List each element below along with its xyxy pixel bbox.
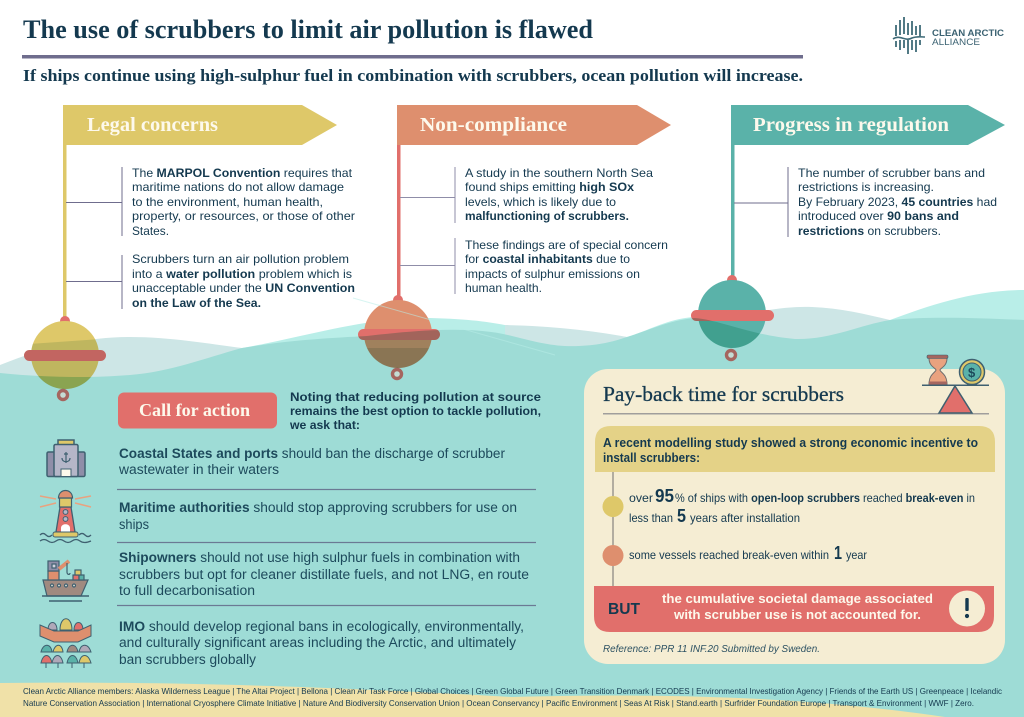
timeline dot: orange bbox=[602, 545, 624, 566]
icon: scale with hourglass and coin: $ bbox=[968, 365, 976, 380]
footer members: Nature Conservation Association | International Cryosphere Climate Initiative | Nature And Biodiversity Conservation Union | Ocean Conservancy | Pacific Environment | Seas At Risk | Stand.earth | Surfrider Foundation Europe | Transport & Environment | WWF | Zero. bbox=[23, 698, 974, 708]
call for action intro: remains the best option to tackle pollution, bbox=[290, 404, 541, 418]
text: MARPOL: maritime nations do not allow damage bbox=[132, 180, 344, 194]
connector brackets bbox=[400, 167, 455, 294]
banner: non-compliance: Non-compliance bbox=[420, 114, 567, 136]
text: 95 percent: 95 bbox=[655, 486, 674, 506]
text: coastal inhabitants: human health. bbox=[465, 281, 542, 295]
text: maritime authorities: Maritime authorities should stop approving scrubbers for use on bbox=[119, 500, 517, 515]
call for action intro: Noting that reducing pollution at source bbox=[290, 390, 541, 404]
text: coastal states: wastewater in their waters bbox=[118, 462, 279, 477]
text: water pollution: on the Law of the Sea. bbox=[132, 296, 261, 310]
text: 95 percent: less than bbox=[629, 511, 673, 525]
text: water pollution: into a water pollution problem which is bbox=[132, 267, 352, 281]
study intro box: A recent modelling study showed a strong economic incentive to bbox=[603, 436, 978, 450]
text: coastal inhabitants bbox=[465, 238, 668, 295]
text: bans: By February 2023, 45 countries had bbox=[798, 195, 997, 209]
text: water pollution: unacceptable under the UN Convention bbox=[132, 281, 355, 295]
text: 95 percent: 5 bbox=[677, 506, 686, 526]
call for action intro: we ask that: bbox=[289, 418, 360, 432]
text: bans: restrictions is increasing. bbox=[798, 180, 934, 194]
title rule bbox=[22, 55, 803, 58]
text: 95 percent bbox=[629, 486, 975, 526]
logo: Clean Arctic Alliance: ALLIANCE bbox=[932, 37, 980, 48]
logo: Clean Arctic Alliance bbox=[893, 17, 1004, 54]
text: bans: restrictions on scrubbers. bbox=[798, 224, 941, 238]
text: MARPOL bbox=[132, 166, 355, 238]
banner: progress in regulation bbox=[731, 105, 1005, 145]
text: IMO bbox=[119, 619, 524, 667]
panel: non-compliance bbox=[397, 105, 671, 300]
banner: progress in regulation: Progress in regulation bbox=[753, 114, 949, 136]
BUT box: BUT bbox=[608, 601, 640, 618]
text: 1 year: 1 bbox=[834, 543, 842, 563]
footer members bbox=[23, 686, 1003, 708]
icon: scale with hourglass and coin bbox=[922, 355, 989, 413]
timeline dot: yellow bbox=[602, 496, 624, 517]
text: high SOx: found ships emitting high SOx bbox=[465, 180, 634, 194]
buoy: teal bbox=[691, 275, 774, 360]
footer band background bbox=[0, 683, 945, 717]
icon: exclamation bbox=[949, 590, 985, 626]
text: water pollution: Scrubbers turn an air pollution problem bbox=[132, 252, 349, 266]
buoy line bbox=[731, 145, 734, 282]
icon: lighthouse bbox=[40, 490, 91, 542]
icon: ship bbox=[42, 561, 89, 601]
panel: progress in regulation bbox=[731, 105, 1005, 282]
call for action button bbox=[118, 392, 277, 428]
text: coastal inhabitants: for coastal inhabitants due to bbox=[465, 252, 630, 266]
text: MARPOL: States. bbox=[132, 224, 169, 238]
buoy line bbox=[397, 145, 400, 300]
subtitle: If ships continue using high-sulphur fuel in combination with scrubbers, ocean pollution will increase. bbox=[23, 66, 803, 85]
text: MARPOL: The MARPOL Convention requires that bbox=[132, 166, 353, 180]
title: The use of scrubbers to limit air pollution is flawed bbox=[23, 14, 593, 44]
text: shipowners: to full decarbonisation bbox=[119, 583, 255, 598]
heading rule bbox=[603, 413, 989, 414]
text: high SOx: malfunctioning of scrubbers. bbox=[465, 209, 629, 223]
text: 95 percent: over bbox=[629, 491, 653, 505]
buoy: orange bbox=[358, 295, 440, 378]
text: maritime authorities: ships bbox=[119, 517, 149, 532]
text: shipowners: Shipowners should not use high sulphur fuels in combination with bbox=[119, 550, 520, 565]
text: 95 percent: % of ships with open-loop scrubbers reached break-even in bbox=[675, 491, 975, 505]
BUT box bbox=[594, 586, 994, 632]
text: 1 year: some vessels reached break-even within bbox=[629, 548, 829, 562]
timeline line bbox=[612, 472, 614, 586]
text: high SOx: levels, which is likely due to bbox=[465, 195, 616, 209]
banner: legal concerns: Legal concerns bbox=[87, 114, 218, 136]
panel: legal concerns bbox=[63, 105, 355, 320]
text: coastal states: Coastal States and ports should ban the discharge of scrubber bbox=[119, 446, 505, 461]
text: coastal inhabitants: These findings are of special concern bbox=[465, 238, 668, 252]
icon: IMO assembly bbox=[40, 619, 91, 668]
heading: pay-back time: Pay-back time for scrubbers bbox=[603, 382, 844, 406]
text: coastal inhabitants: impacts of sulphur emissions on bbox=[465, 267, 640, 281]
call for action intro bbox=[289, 390, 541, 432]
text: bans bbox=[798, 166, 997, 238]
study intro box bbox=[595, 426, 995, 472]
banner: non-compliance bbox=[397, 105, 671, 145]
buoy line bbox=[63, 145, 66, 320]
text: 95 percent: years after installation bbox=[690, 511, 800, 525]
text: high SOx bbox=[465, 166, 653, 223]
text: MARPOL: to the environment, human health, bbox=[132, 195, 323, 209]
text: 1 year bbox=[629, 543, 867, 563]
text: high SOx: A study in the southern North Sea bbox=[465, 166, 653, 180]
panel: pay-back time bbox=[584, 355, 1005, 664]
text: bans: The number of scrubber bans and bbox=[798, 166, 985, 180]
text: maritime authorities bbox=[119, 500, 517, 532]
call for action button: Call for action bbox=[139, 400, 250, 420]
connector bracket bbox=[734, 167, 788, 237]
buoy: yellow bbox=[24, 316, 106, 400]
text: 1 year: year bbox=[846, 548, 867, 562]
reference: Reference: PPR 11 INF.20 Submitted by Sweden. bbox=[603, 643, 820, 655]
text: coastal states bbox=[118, 446, 505, 477]
text: bans: introduced over 90 bans and bbox=[798, 209, 959, 223]
text: IMO: and culturally significant areas including the Arctic, and ultimately bbox=[119, 635, 516, 650]
text: IMO: ban scrubbers globally bbox=[119, 652, 256, 667]
waves background bbox=[0, 290, 1024, 717]
study intro box: install scrubbers: bbox=[603, 451, 700, 465]
BUT box: with scrubber use is not accounted for. bbox=[673, 607, 921, 622]
text: IMO: IMO should develop regional bans in ecologically, environmentally, bbox=[119, 619, 524, 634]
text: shipowners bbox=[119, 550, 529, 598]
connector brackets bbox=[66, 167, 122, 309]
text: shipowners: scrubbers but opt for cleaner distillate fuels, and not LNG, en route bbox=[119, 567, 529, 582]
text: water pollution bbox=[132, 252, 355, 310]
banner: legal concerns bbox=[63, 105, 337, 145]
text: MARPOL: property, or resources, or those of other bbox=[132, 209, 355, 223]
icon: port building bbox=[47, 440, 85, 476]
BUT box: the cumulative societal damage associated bbox=[662, 591, 933, 606]
logo: Clean Arctic Alliance: CLEAN ARCTIC bbox=[932, 28, 1004, 39]
